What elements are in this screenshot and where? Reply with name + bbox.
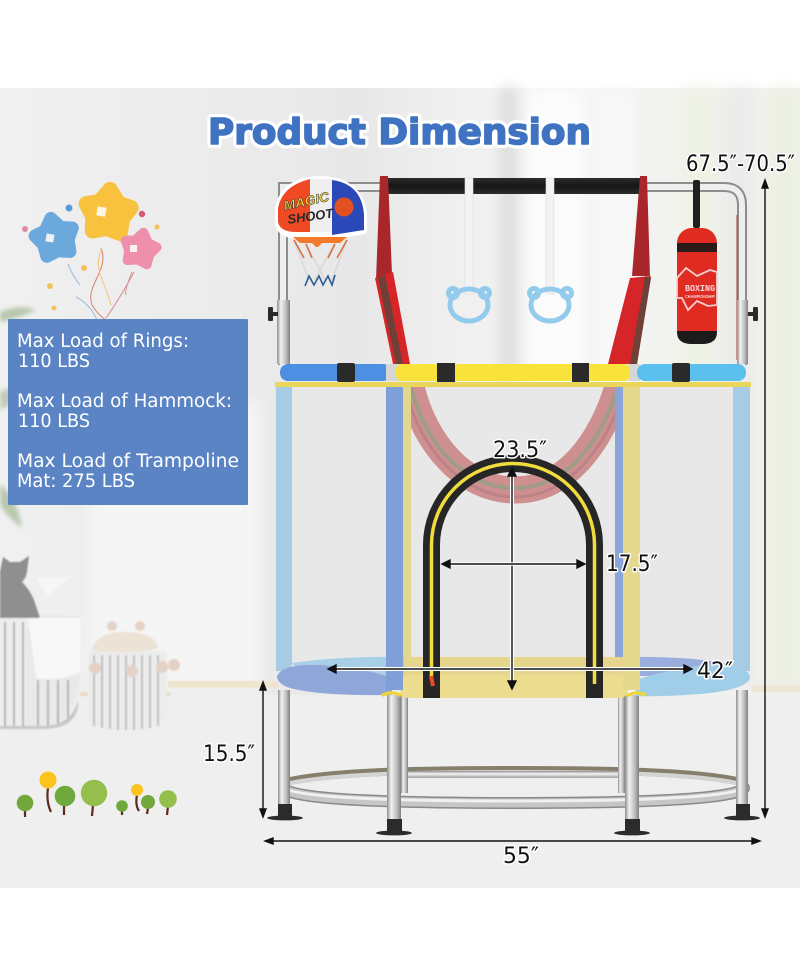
arrow: door width 17.5 in: [442, 560, 585, 568]
base ring: [284, 770, 744, 803]
dimension labels: 23.5″: [493, 438, 547, 463]
padded pole cover: [275, 363, 751, 387]
panel: max load info: 110 LBS: [18, 351, 90, 372]
gym ring straps: [465, 178, 554, 294]
title: Product Dimension: [208, 112, 591, 153]
arrow: overall height: [762, 180, 768, 817]
title: Product Dimension: [208, 112, 591, 153]
arrow: overall width 55 in: [265, 838, 760, 844]
dimension arrows: [260, 180, 768, 844]
rear posts: [403, 386, 411, 671]
dimension labels: 17.5″: [606, 552, 658, 577]
arrow: leg height 15.5 in: [260, 682, 266, 817]
dimension labels: [203, 152, 795, 869]
door zipper arch: [431, 464, 594, 698]
panel: max load info: Max Load of Trampoline: [17, 451, 239, 472]
punching bag: [677, 180, 717, 344]
star balloons: [22, 188, 160, 320]
basketball hoop: [275, 176, 367, 286]
punching bag: BOXING: [685, 284, 715, 294]
upper frame: [277, 187, 748, 365]
arrow: door height 23.5 in: [508, 468, 516, 689]
gym rings: [448, 288, 572, 321]
small trees: [17, 772, 177, 817]
panel: max load info: Mat: 275 LBS: [17, 471, 135, 492]
feet: [267, 804, 760, 835]
hammock straps: [375, 176, 651, 364]
basketball hoop: SHOOT: [287, 205, 335, 227]
punching bag: CHAMPIONSHIP: [685, 294, 715, 299]
legs: [267, 690, 760, 835]
basketball hoop: MAGIC: [282, 189, 331, 213]
trampoline: [267, 176, 760, 835]
hammock seen through net: [405, 387, 625, 497]
height knobs: [268, 307, 758, 321]
trampoline mat pad: [277, 657, 750, 698]
panel: max load info: [8, 319, 248, 505]
black foam grip: [385, 178, 641, 194]
plant leaves: [0, 307, 36, 528]
toy baskets and cat: [0, 556, 180, 730]
white bottom band: [0, 888, 800, 977]
panel: max load info: Max Load of Hammock:: [17, 391, 232, 412]
outer posts: [276, 386, 292, 671]
arrow: mat width 42 in: [328, 665, 692, 673]
dimension labels: 42″: [697, 659, 733, 684]
front net posts: [386, 386, 640, 690]
text: rings load: Max Load of Rings:: [17, 331, 189, 352]
safety net enclosure: [276, 386, 750, 682]
dimension labels: 15.5″: [203, 742, 255, 767]
panel: max load info: 110 LBS: [18, 411, 90, 432]
balloon highlights: [45, 206, 137, 252]
dimension labels: 55″: [503, 844, 539, 869]
